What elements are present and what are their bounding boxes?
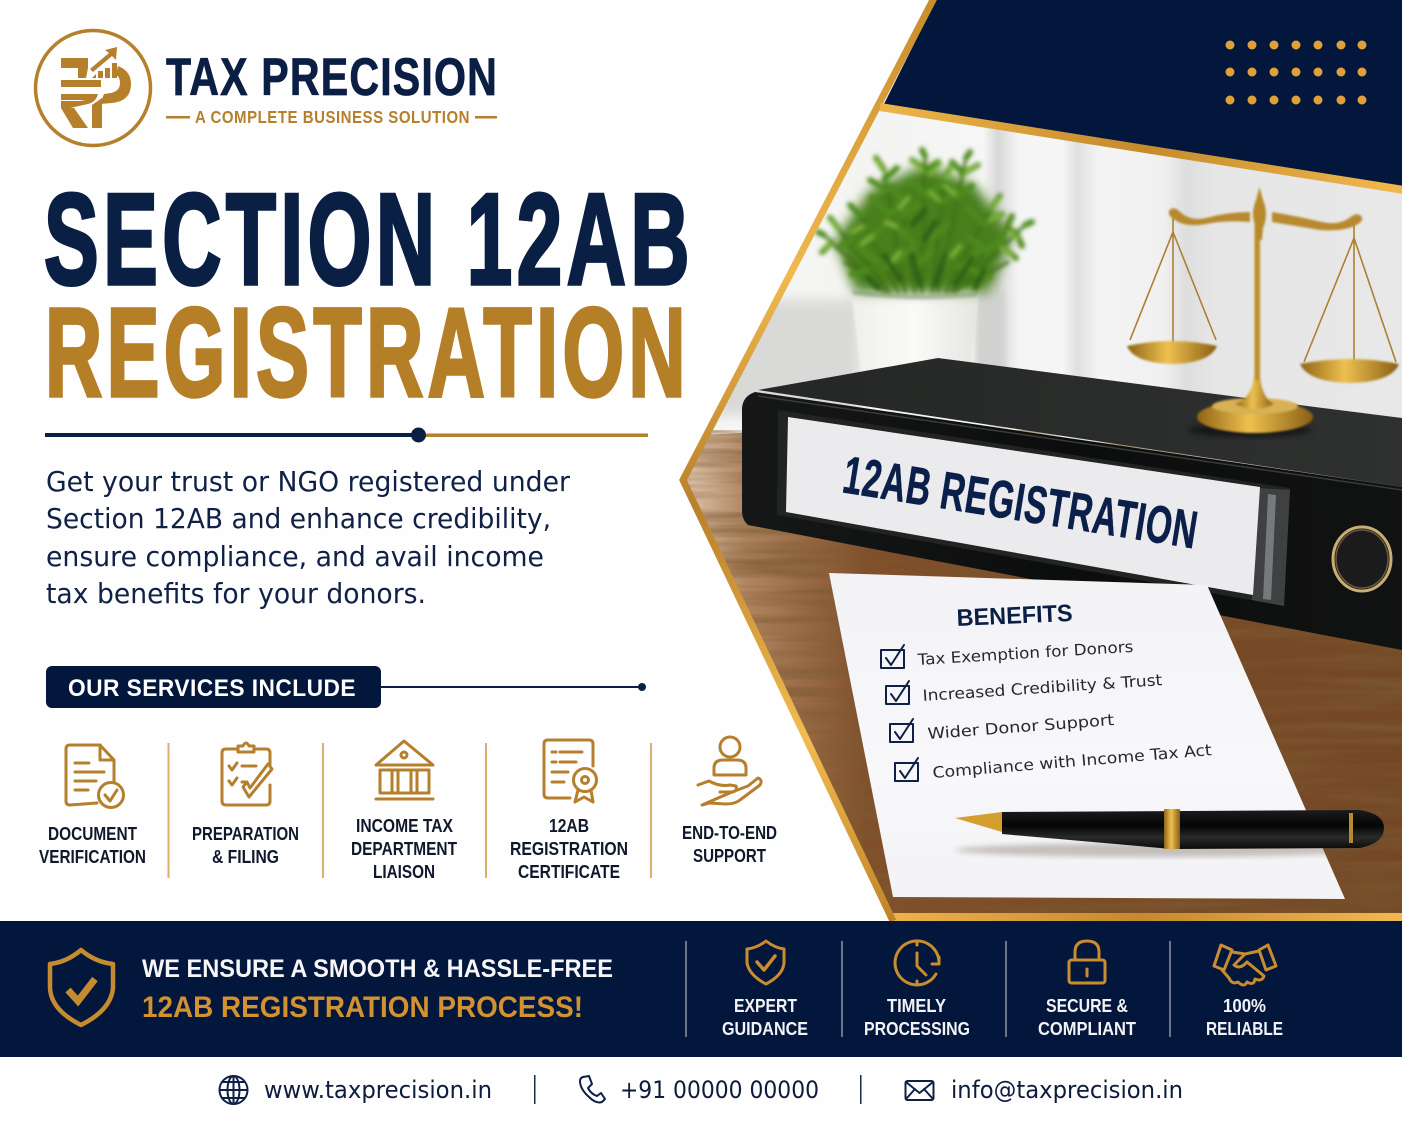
feature: timely processing: PROCESSING xyxy=(864,1018,970,1039)
title: REGISTRATION xyxy=(45,282,690,423)
icon: padlock xyxy=(1069,941,1105,983)
feature: secure and compliant: SECURE & xyxy=(1046,995,1128,1016)
binder ring xyxy=(1333,527,1391,591)
service: registration certificate xyxy=(510,740,628,882)
icon: document with check xyxy=(66,745,124,808)
service: income tax department liaison: LIAISON xyxy=(373,861,435,882)
intro paragraph: tax benefits for your donors. xyxy=(46,578,426,610)
gold bottom strip xyxy=(880,913,1402,921)
phone: +91 00000 00000 xyxy=(620,1076,819,1104)
icon: certificate xyxy=(544,740,596,802)
feature: expert guidance: EXPERT xyxy=(734,995,798,1016)
email: info@taxprecision.in xyxy=(951,1076,1183,1104)
service: income tax department liaison xyxy=(351,741,458,882)
gold dot grid xyxy=(1226,40,1366,104)
brand name: TAX PRECISION xyxy=(166,48,498,107)
service dividers xyxy=(168,743,651,878)
services heading: OUR SERVICES INCLUDE xyxy=(68,675,356,702)
icon: government building xyxy=(376,741,433,799)
feature: secure and compliant xyxy=(1038,941,1137,1039)
wooden desk xyxy=(680,430,1402,925)
service: document verification xyxy=(39,745,146,867)
services heading xyxy=(46,666,646,708)
logo emblem xyxy=(36,30,150,146)
brass scales xyxy=(1127,187,1399,437)
icon: envelope xyxy=(906,1081,934,1100)
service: registration certificate: CERTIFICATE xyxy=(518,861,620,882)
icon: large shield xyxy=(50,950,113,1025)
feature: expert guidance: GUIDANCE xyxy=(722,1018,808,1039)
service: end-to-end support xyxy=(682,737,777,866)
service: preparation and filing: & FILING xyxy=(212,846,279,867)
feature: 100% reliable: RELIABLE xyxy=(1206,1018,1283,1039)
tagline: A COMPLETE BUSINESS SOLUTION xyxy=(195,107,470,127)
checklist xyxy=(881,638,1212,782)
assurance band xyxy=(0,921,1402,1057)
checklist: Increased Credibility & Trust xyxy=(922,671,1163,705)
icon: globe xyxy=(220,1076,248,1104)
website: www.taxprecision.in xyxy=(264,1076,492,1104)
photo: binder, scales and benefits sheet xyxy=(680,100,1402,925)
intro paragraph: ensure compliance, and avail income xyxy=(46,541,544,573)
plant xyxy=(818,150,1032,292)
service: preparation and filing xyxy=(192,743,299,867)
feature: expert guidance xyxy=(722,941,808,1039)
service: income tax department liaison: INCOME TAX xyxy=(356,815,454,836)
feature: 100% reliable: 100% xyxy=(1223,995,1266,1016)
service: registration certificate: 12AB xyxy=(549,815,589,836)
service: registration certificate: REGISTRATION xyxy=(510,838,628,859)
contact bar xyxy=(220,1075,1183,1104)
pen xyxy=(955,809,1384,857)
label text: 12AB REGISTRATION xyxy=(839,446,1202,560)
logo xyxy=(36,30,498,146)
navy corner panel xyxy=(884,0,1402,186)
assurance message: 12AB REGISTRATION PROCESS! xyxy=(142,991,583,1024)
title: SECTION 12AB xyxy=(44,166,694,312)
intro paragraph: Section 12AB and enhance credibility, xyxy=(46,503,551,535)
checklist: Compliance with Income Tax Act xyxy=(932,741,1212,782)
title xyxy=(44,166,694,423)
assurance message xyxy=(142,955,613,1024)
service: income tax department liaison: DEPARTMENT xyxy=(351,838,458,859)
feature: secure and compliant: COMPLIANT xyxy=(1038,1018,1137,1039)
icon: handshake xyxy=(1214,945,1276,985)
icon: shield check xyxy=(747,941,784,984)
feature: timely processing: TIMELY xyxy=(887,995,947,1016)
service: end-to-end support: SUPPORT xyxy=(693,845,767,866)
feature: 100% reliable xyxy=(1206,945,1283,1039)
sheet heading: BENEFITS xyxy=(956,600,1073,632)
service: document verification: DOCUMENT xyxy=(48,823,138,844)
benefits sheet xyxy=(829,573,1345,899)
binder xyxy=(742,358,1402,650)
icon: clock xyxy=(895,941,939,985)
service: preparation and filing: PREPARATION xyxy=(192,823,299,844)
service: end-to-end support: END-TO-END xyxy=(682,822,777,843)
binder label xyxy=(786,417,1260,595)
binder label pocket xyxy=(777,410,1290,606)
checklist: Wider Donor Support xyxy=(927,711,1115,743)
band dividers xyxy=(686,941,1170,1037)
service: document verification: VERIFICATION xyxy=(39,846,146,867)
gold chevron frame xyxy=(683,0,1402,921)
icon: clipboard xyxy=(222,743,272,805)
feature: timely processing xyxy=(864,941,970,1039)
checklist: Tax Exemption for Donors xyxy=(916,638,1134,669)
intro paragraph: Get your trust or NGO registered under xyxy=(46,466,571,498)
icon: telephone xyxy=(580,1076,605,1102)
assurance message: WE ENSURE A SMOOTH & HASSLE-FREE xyxy=(142,955,613,983)
pot xyxy=(852,290,977,362)
intro paragraph xyxy=(46,466,571,610)
icon: person on open hand xyxy=(698,737,761,805)
title divider xyxy=(45,428,648,442)
